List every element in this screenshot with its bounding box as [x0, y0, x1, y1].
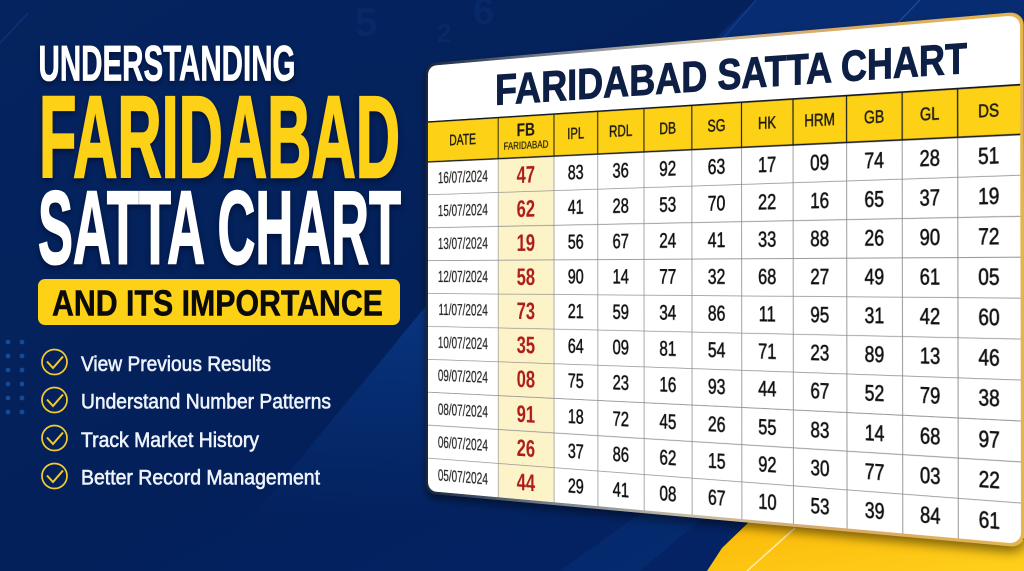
row 15/07/2024: 65	[864, 186, 884, 212]
row 11/07/2024: 73	[517, 297, 535, 325]
row 15/07/2024: 37	[920, 184, 940, 211]
row 11/07/2024: 60	[978, 304, 1000, 331]
table header	[449, 100, 999, 153]
table header: GB	[864, 106, 884, 127]
row 08/07/2024	[438, 399, 1000, 453]
row 10/07/2024: 13	[920, 343, 940, 370]
row 05/07/2024: 05/07/2024	[438, 466, 488, 488]
row 05/07/2024: 67	[708, 485, 726, 510]
row 16/07/2024: 36	[612, 158, 629, 182]
row 10/07/2024: 23	[810, 341, 829, 366]
row 13/07/2024	[438, 223, 1000, 256]
list item: track market history	[42, 426, 259, 452]
table header: IPL	[567, 124, 584, 143]
list item: view previous results	[42, 350, 271, 376]
row 08/07/2024: 18	[568, 405, 584, 428]
row 09/07/2024	[438, 365, 1000, 412]
row 13/07/2024: 88	[810, 226, 829, 251]
row 12/07/2024: 77	[659, 265, 676, 288]
row 15/07/2024: 16	[810, 188, 829, 213]
row 09/07/2024: 79	[920, 383, 940, 409]
row 05/07/2024: 44	[517, 468, 535, 497]
heading: understanding: UNDERSTANDING	[38, 36, 296, 92]
row 13/07/2024: 67	[613, 230, 629, 253]
row 13/07/2024: 72	[978, 223, 1000, 250]
row 09/07/2024: 23	[613, 371, 629, 395]
row 16/07/2024: 17	[758, 152, 776, 177]
row 08/07/2024: 55	[758, 414, 777, 440]
row 05/07/2024: 61	[979, 506, 1000, 534]
row 05/07/2024: 39	[865, 497, 885, 524]
row 12/07/2024: 12/07/2024	[438, 268, 488, 286]
row 13/07/2024: 56	[568, 230, 584, 253]
row 15/07/2024: 62	[517, 194, 535, 222]
row 09/07/2024: 16	[659, 373, 676, 397]
row 15/07/2024	[438, 183, 1000, 222]
table header: DB	[659, 119, 676, 138]
row 16/07/2024: 74	[864, 147, 884, 173]
row 12/07/2024: 14	[613, 265, 629, 288]
row 05/07/2024: 84	[920, 502, 941, 529]
table header: HK	[758, 113, 776, 133]
row 10/07/2024: 81	[659, 337, 676, 361]
row 10/07/2024	[438, 331, 1000, 371]
row 06/07/2024: 22	[979, 466, 1000, 494]
table header: HRM	[804, 109, 835, 131]
row 11/07/2024: 11/07/2024	[438, 301, 487, 319]
background: 2	[437, 18, 451, 48]
row 11/07/2024: 42	[920, 304, 940, 330]
row 09/07/2024: 38	[978, 385, 1000, 412]
row 12/07/2024: 68	[758, 265, 776, 289]
row 12/07/2024: 05	[978, 264, 1000, 290]
row 15/07/2024: 53	[659, 193, 676, 216]
table header: DS	[978, 100, 999, 122]
row 06/07/2024: 30	[810, 455, 829, 481]
row 12/07/2024: 27	[810, 265, 829, 289]
row 06/07/2024: 26	[517, 433, 535, 462]
row 15/07/2024: 41	[568, 195, 584, 218]
row 05/07/2024	[438, 466, 1000, 534]
list item: view previous results: View Previous Results	[81, 352, 271, 376]
heading: faridabad: FARIDABAD	[39, 72, 400, 202]
row 16/07/2024: 92	[659, 156, 676, 180]
badge: and its importance: AND ITS IMPORTANCE	[52, 282, 383, 324]
row 08/07/2024: 26	[708, 412, 726, 437]
row 13/07/2024: 19	[517, 228, 535, 256]
row 15/07/2024: 28	[613, 194, 629, 217]
row 10/07/2024: 46	[978, 345, 1000, 371]
row 11/07/2024: 21	[568, 300, 584, 323]
row 08/07/2024: 45	[659, 409, 676, 434]
row 08/07/2024: 97	[979, 425, 1000, 453]
row 10/07/2024: 89	[865, 342, 884, 368]
row 08/07/2024: 72	[613, 407, 629, 431]
row 09/07/2024: 08	[517, 365, 535, 394]
heading: satta chart: SATTA CHART	[38, 170, 401, 286]
row 12/07/2024	[438, 263, 1000, 291]
row 08/07/2024: 14	[865, 420, 884, 446]
row 06/07/2024: 03	[920, 462, 941, 489]
row 13/07/2024: 41	[708, 228, 725, 252]
row 06/07/2024: 77	[865, 459, 884, 485]
row 05/07/2024: 53	[811, 493, 830, 519]
row 11/07/2024: 11	[759, 302, 776, 327]
table header: GL	[920, 103, 939, 125]
panel: chart card	[422, 12, 1024, 560]
row 09/07/2024: 67	[810, 379, 829, 404]
table header: SG	[707, 116, 725, 136]
row 12/07/2024: 32	[708, 265, 725, 289]
row 11/07/2024: 86	[708, 302, 725, 326]
table rows	[438, 142, 1000, 534]
row 12/07/2024: 58	[517, 263, 535, 291]
row 16/07/2024: 63	[708, 154, 725, 179]
row 10/07/2024: 35	[517, 331, 535, 359]
row 12/07/2024: 90	[568, 265, 584, 288]
benefits list	[42, 350, 331, 490]
table header: FB	[517, 120, 535, 141]
list item: understand number patterns: Understand Number Patterns	[81, 390, 331, 414]
list item: better record management: Better Record Management	[81, 466, 320, 490]
row 15/07/2024: 15/07/2024	[438, 200, 488, 219]
row 10/07/2024: 10/07/2024	[438, 334, 488, 353]
row 16/07/2024	[438, 142, 999, 188]
row 13/07/2024: 33	[758, 227, 776, 252]
row 06/07/2024: 15	[708, 448, 726, 473]
row 06/07/2024: 37	[568, 439, 584, 463]
row 05/07/2024: 41	[613, 478, 629, 502]
row 13/07/2024: 13/07/2024	[438, 234, 488, 252]
row 05/07/2024: 10	[758, 489, 777, 515]
row 06/07/2024: 62	[659, 445, 676, 470]
row 16/07/2024: 09	[810, 150, 829, 175]
row 06/07/2024: 92	[758, 452, 777, 477]
row 09/07/2024: 52	[865, 381, 884, 407]
row 16/07/2024: 28	[919, 145, 940, 171]
row 12/07/2024: 49	[864, 264, 884, 290]
table header: DATE	[449, 130, 476, 149]
row 15/07/2024: 70	[708, 191, 725, 215]
row 09/07/2024: 44	[758, 377, 776, 402]
row 10/07/2024: 54	[708, 338, 725, 363]
row 05/07/2024: 29	[568, 474, 584, 498]
list item: track market history: Track Market History	[81, 428, 259, 452]
row 11/07/2024: 59	[613, 301, 629, 324]
row 11/07/2024	[438, 297, 1000, 331]
table header: RDL	[609, 121, 632, 141]
row 11/07/2024: 95	[810, 303, 829, 328]
row 09/07/2024: 75	[568, 370, 584, 393]
row 16/07/2024: 51	[978, 142, 999, 169]
table header: FARIDABAD	[504, 139, 548, 153]
row 06/07/2024: 86	[613, 442, 629, 466]
row 16/07/2024: 83	[568, 160, 584, 184]
row 13/07/2024: 90	[920, 224, 940, 250]
row 15/07/2024: 22	[758, 189, 776, 214]
row 08/07/2024: 83	[810, 417, 829, 443]
row 08/07/2024: 68	[920, 423, 940, 449]
row 11/07/2024: 34	[659, 301, 676, 325]
row 09/07/2024: 09/07/2024	[438, 367, 488, 387]
row 16/07/2024: 47	[517, 160, 535, 188]
row 09/07/2024: 93	[708, 375, 726, 400]
row 12/07/2024: 61	[920, 264, 940, 290]
row 05/07/2024: 08	[659, 481, 676, 506]
row 06/07/2024	[438, 433, 1000, 494]
row 06/07/2024: 06/07/2024	[438, 433, 488, 454]
row 10/07/2024: 64	[568, 335, 584, 358]
row 08/07/2024: 08/07/2024	[438, 400, 488, 421]
background: 5	[355, 1, 377, 45]
table grid	[428, 84, 1021, 538]
row 13/07/2024: 26	[864, 225, 884, 251]
row 16/07/2024: 16/07/2024	[438, 166, 488, 186]
row 10/07/2024: 09	[613, 336, 629, 359]
row 08/07/2024: 91	[517, 399, 535, 428]
row 15/07/2024: 19	[978, 183, 999, 209]
row 11/07/2024: 31	[865, 303, 884, 329]
row 13/07/2024: 24	[659, 229, 676, 252]
row 10/07/2024: 71	[758, 340, 776, 364]
